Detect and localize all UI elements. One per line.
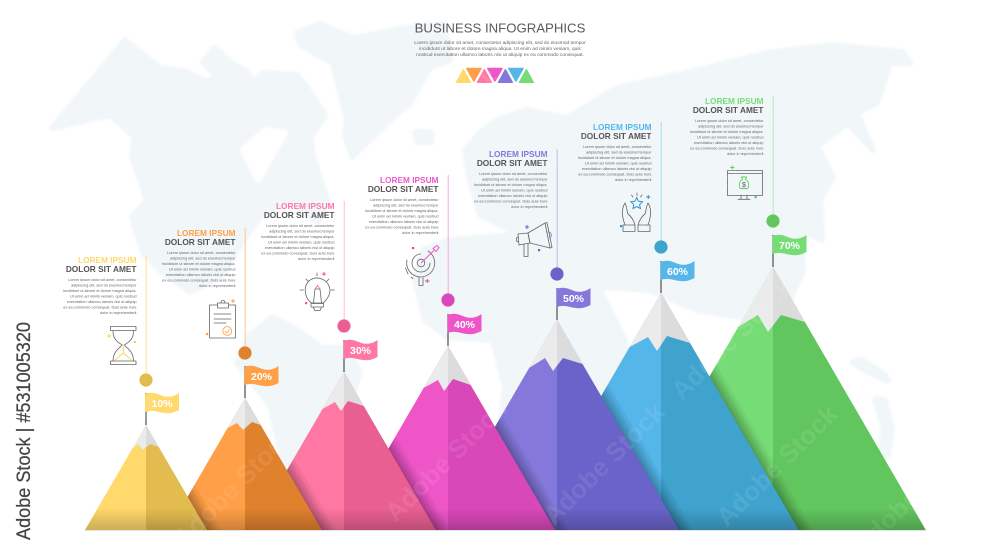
callout 7: green: adipiscing elit, sed do eiusmod tempor xyxy=(698,124,764,128)
callout 2: orange: LOREM IPSUM xyxy=(177,228,236,238)
callout 1: yellow: exercitation ullamco laboris nisi ut aliquip xyxy=(67,300,136,304)
flag 30% xyxy=(343,340,378,372)
callout 1: yellow: incididunt ut labore et dolore magna aliqua. xyxy=(63,289,136,293)
callout 1: yellow: ex ea commodo consequat. Duis aute irure xyxy=(63,306,136,310)
subtitle text: nostrud exercitation ullamco laboris nisi ut aliquip ex ea commodo consequat. xyxy=(416,52,584,58)
callout 5: purple: exercitation ullamco laboris nisi ut aliquip xyxy=(478,194,548,198)
callout 5: purple: incididunt ut labore et dolore magna aliqua. xyxy=(474,183,548,187)
callout 7: green xyxy=(690,96,780,228)
callout 1: yellow xyxy=(63,255,153,387)
mountain range xyxy=(85,267,926,531)
watermarks: Adobe Stock xyxy=(197,236,331,370)
callout 2: orange: exercitation ullamco laboris nisi ut aliquip xyxy=(166,273,236,277)
subtitle text: Lorem ipsum dolor sit amet, consectetur adipiscing elit, sed do eiusmod tempor xyxy=(414,40,586,46)
callout 2: orange: DOLOR SIT AMET xyxy=(165,237,236,247)
watermarks: Adobe Stock xyxy=(665,271,799,405)
callout 4: magenta: DOLOR SIT AMET xyxy=(368,184,438,194)
watermarks: Adobe Stock xyxy=(472,106,606,240)
callout 4: magenta xyxy=(365,175,455,307)
callout 7: green: dolor in reprehenderit xyxy=(727,152,764,156)
callout 1: yellow: adipiscing elit, sed do eiusmod tempor xyxy=(71,284,137,288)
flag 50% xyxy=(556,288,590,320)
callout 6: blue: Ut enim ad minim veniam, quis nostrud xyxy=(585,162,652,166)
watermarks: Adobe Stock xyxy=(33,49,167,183)
callout 5: purple: LOREM IPSUM xyxy=(489,149,548,159)
flag 20%: 20% xyxy=(251,371,273,383)
icon: clipboard xyxy=(206,299,236,338)
callout 4: magenta: Lorem ipsum dolor sit amet, consectetur xyxy=(370,198,439,202)
flag 50%: 50% xyxy=(563,293,585,305)
watermarks: Adobe Stock xyxy=(710,398,844,532)
callout 2: orange xyxy=(162,228,252,360)
callout 6: blue: incididunt ut labore et dolore magna aliqua. xyxy=(578,156,652,160)
watermarks: Adobe Stock xyxy=(167,419,301,553)
callout 7: green: incididunt ut labore et dolore magna aliqua. xyxy=(690,130,764,134)
callout 3: pink: DOLOR SIT AMET xyxy=(264,210,334,220)
callout 2: orange: dolor in reprehenderit xyxy=(199,284,236,288)
flag 10% xyxy=(145,393,179,425)
callout 3: pink: LOREM IPSUM xyxy=(276,201,335,211)
callout 5: purple: Lorem ipsum dolor sit amet, consectetur xyxy=(479,172,548,176)
callout 4: magenta: dolor in reprehenderit xyxy=(402,231,439,235)
callout 7: green: LOREM IPSUM xyxy=(705,96,764,106)
icon: monitor with money bag xyxy=(728,166,762,199)
callout 4: magenta: LOREM IPSUM xyxy=(380,175,439,185)
shadow on orange mountain xyxy=(188,485,220,530)
icon: target with dart xyxy=(406,246,439,286)
callout 6: blue: adipiscing elit, sed do eiusmod tempor xyxy=(586,150,652,154)
mountain 4: magenta xyxy=(341,346,555,530)
callout 6: blue: Lorem ipsum dolor sit amet, consectetur xyxy=(583,145,652,149)
mountain 1: yellow xyxy=(85,425,207,530)
callout 5: purple xyxy=(474,149,564,281)
flag 30%: 30% xyxy=(350,345,372,357)
flag 70% xyxy=(772,235,806,267)
callout 3: pink: dolor in reprehenderit xyxy=(298,257,335,261)
callout 3: pink: incididunt ut labore et dolore magna aliqua. xyxy=(261,235,334,239)
subtitle text xyxy=(414,40,586,58)
flag 60% xyxy=(660,261,694,293)
watermarks: Adobe Stock xyxy=(379,393,513,527)
callout 5: purple: adipiscing elit, sed do eiusmod tempor xyxy=(482,178,548,182)
subtitle text: incididunt ut labore et dolore magna aliqua. Ut enim ad minim veniam, quis xyxy=(419,46,581,52)
icon: light bulb xyxy=(300,272,334,310)
flag 60%: 60% xyxy=(667,266,689,278)
icon: monitor with money bag: $ xyxy=(742,182,746,189)
shadow on purple mountain xyxy=(495,416,568,530)
callout 6: blue xyxy=(578,122,668,254)
callout 3: pink: adipiscing elit, sed do eiusmod tempor xyxy=(269,230,335,234)
callout 1: yellow: Ut enim ad minim veniam, quis nostrud xyxy=(70,294,136,298)
callout 5: purple: dolor in reprehenderit xyxy=(511,205,548,209)
callout 7: green: DOLOR SIT AMET xyxy=(693,105,764,115)
watermarks: Adobe Stock xyxy=(165,88,299,222)
mountain 7: green xyxy=(620,267,926,530)
callout 7: green: Lorem ipsum dolor sit amet, consectetur xyxy=(695,119,764,123)
watermarks: Adobe Stock xyxy=(537,396,671,530)
callout 6: blue: dolor in reprehenderit xyxy=(615,178,652,182)
callout 5: purple: ex ea commodo consequat. Duis aute irure xyxy=(474,200,548,204)
watermarks: Adobe Stock xyxy=(372,61,506,195)
shadow on green mountain xyxy=(710,365,812,530)
watermarks: Adobe Stock xyxy=(700,68,834,202)
flag 20% xyxy=(244,366,278,398)
flag 10%: 10% xyxy=(151,398,173,410)
callout 4: magenta: adipiscing elit, sed do eiusmod tempor xyxy=(373,204,439,208)
callout 3: pink xyxy=(261,201,351,333)
watermarks: Adobe Stock xyxy=(32,386,166,520)
shadow on magenta mountain xyxy=(388,437,450,530)
callout 2: orange: adipiscing elit, sed do eiusmod tempor xyxy=(170,256,236,260)
callout 6: blue: exercitation ullamco laboris nisi ut aliquip xyxy=(582,167,652,171)
callout 1: yellow: DOLOR SIT AMET xyxy=(66,264,136,274)
flag 70%: 70% xyxy=(779,240,801,252)
flag 40%: 40% xyxy=(454,319,476,331)
callout 7: green: exercitation ullamco laboris nisi ut aliquip xyxy=(694,141,764,145)
watermarks: Adobe Stock xyxy=(827,109,961,243)
shadow on pink mountain xyxy=(287,458,336,530)
callout 4: magenta: ex ea commodo consequat. Duis aute irure xyxy=(365,226,438,230)
callout 3: pink: exercitation ullamco laboris nisi ut aliquip xyxy=(265,246,334,250)
callout 2: orange: incididunt ut labore et dolore magna aliqua. xyxy=(162,262,236,266)
callout 6: blue: DOLOR SIT AMET xyxy=(581,131,652,141)
callout 2: orange: Ut enim ad minim veniam, quis nostrud xyxy=(169,268,236,272)
shadow on blue mountain xyxy=(601,384,692,530)
mountain 5: purple xyxy=(435,320,679,530)
mountain 6: blue xyxy=(523,293,799,530)
callout 1: yellow: LOREM IPSUM xyxy=(78,255,137,265)
callout 3: pink: Ut enim ad minim veniam, quis nostrud xyxy=(268,240,334,244)
callout 3: pink: ex ea commodo consequat. Duis aute irure xyxy=(261,252,334,256)
callout 4: magenta: exercitation ullamco laboris nisi ut aliquip xyxy=(369,220,438,224)
callout 4: magenta: incididunt ut labore et dolore magna aliqua. xyxy=(365,209,438,213)
callout 5: purple: Ut enim ad minim veniam, quis nostrud xyxy=(481,188,548,192)
mountain 2: orange xyxy=(168,398,322,530)
callout 5: purple: DOLOR SIT AMET xyxy=(477,158,548,168)
callout 6: blue: ex ea commodo consequat. Duis aute irure xyxy=(578,172,652,176)
icon: hands holding star xyxy=(620,193,651,232)
title: BUSINESS INFOGRAPHICS xyxy=(415,21,586,36)
callout 3: pink: Lorem ipsum dolor sit amet, consectetur xyxy=(266,224,335,228)
callout 2: orange: ex ea commodo consequat. Duis aute irure xyxy=(162,278,236,282)
icon: megaphone xyxy=(516,222,552,256)
callout 7: green: ex ea commodo consequat. Duis aute irure xyxy=(690,146,764,150)
mountain 3: pink xyxy=(252,372,436,530)
callout 1: yellow: dolor in reprehenderit xyxy=(100,311,137,315)
callout 7: green: Ut enim ad minim veniam, quis nostrud xyxy=(697,136,764,140)
flag 40% xyxy=(447,314,482,346)
side credit text: Adobe Stock | #531005320 xyxy=(13,322,35,540)
world map background xyxy=(52,24,910,527)
callout 1: yellow: Lorem ipsum dolor sit amet, consectetur xyxy=(68,278,137,282)
logo: row of coloured triangles xyxy=(456,68,533,82)
icon: hourglass xyxy=(108,326,136,365)
callout 4: magenta: Ut enim ad minim veniam, quis nostrud xyxy=(372,214,438,218)
callout 2: orange: Lorem ipsum dolor sit amet, consectetur xyxy=(167,251,236,255)
callout 6: blue: LOREM IPSUM xyxy=(593,122,652,132)
